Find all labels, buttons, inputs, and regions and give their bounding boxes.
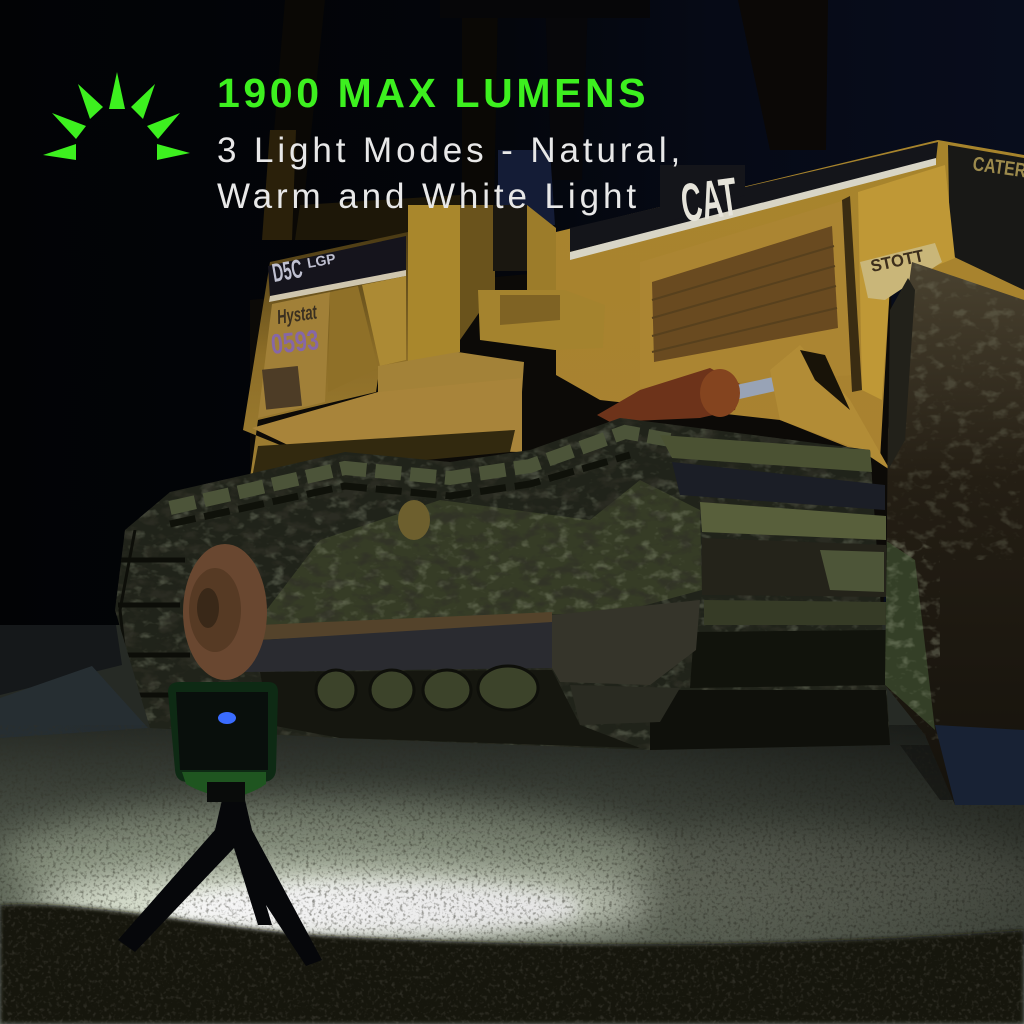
dark foreground shadow [0,900,1024,1024]
engine side panel [640,200,856,388]
blue indicator [218,712,236,724]
bulldozer body [243,140,1024,478]
crawler track [100,410,900,760]
machine lettering: Hystat [276,301,319,329]
lower dark band [260,670,640,748]
machine upper frame silhouettes [262,0,828,240]
cab lower step [378,352,524,392]
idler wheel [183,544,267,680]
night sky background [0,0,1024,640]
machine lettering: LGP [306,250,337,271]
radiator grille [652,226,838,362]
machine lettering: 0593 [269,324,320,360]
main engine housing [556,140,1024,460]
top run track shoes [170,432,670,508]
heading block [217,70,684,216]
track frame mass [255,480,702,625]
lamp body [168,682,278,782]
machine lettering: CAT [677,167,741,234]
push arm [770,345,890,470]
vertical dark seam [842,196,862,392]
subtitle: light modes: 3 Light Modes - Natural, [217,131,684,170]
bracket [478,290,605,350]
carrier roller [398,500,430,540]
rollers [316,666,538,710]
bright right door [858,165,955,400]
machine lettering: STOTT [869,246,926,276]
machine lettering: D5C [270,253,305,288]
track frame rail [258,612,552,640]
machine lettering [269,153,1024,360]
subtitle: light modes: Warm and White Light [217,177,640,216]
subtitle: light modes [217,131,684,216]
tripod [118,800,322,966]
dark undercarriage backdrop [250,240,895,640]
company door decal [860,243,942,300]
dozer blade [880,260,1024,805]
hydraulic cylinder [597,368,742,422]
bulb rays icon [43,72,190,160]
title: 1900 MAX LUMENS [217,70,649,116]
right track shoes [660,435,872,472]
ground with gravel [0,625,1024,1024]
work light on tripod [118,682,322,966]
rear cab panels [243,232,408,478]
